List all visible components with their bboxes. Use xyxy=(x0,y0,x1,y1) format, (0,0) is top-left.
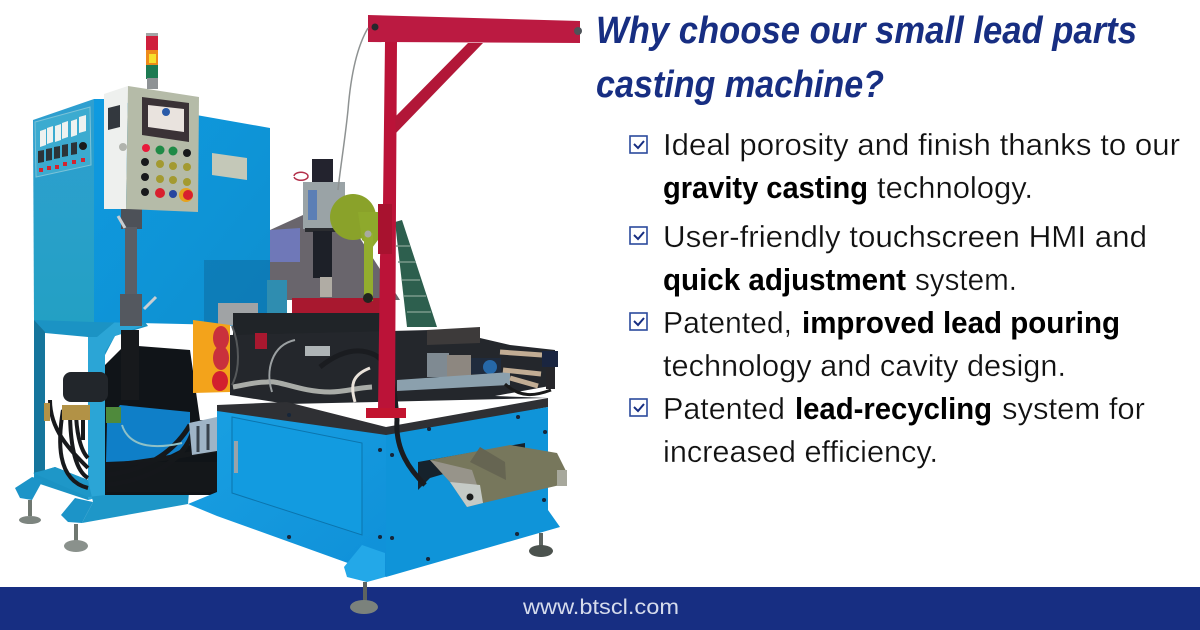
benefit 1: Ideal porosity and finish thanks to our xyxy=(663,127,1180,162)
benefit 4 xyxy=(630,391,1145,469)
base body xyxy=(188,398,560,614)
red crane xyxy=(330,15,582,418)
heading: Why choose our small lead parts xyxy=(596,10,1137,52)
checkbox icon xyxy=(630,227,647,244)
signal light tower xyxy=(146,33,158,89)
benefit 1 xyxy=(630,127,1180,205)
checkbox icon xyxy=(630,399,647,416)
outfeed conveyor xyxy=(418,443,567,507)
benefit 1: gravity casting xyxy=(663,170,868,205)
front foot xyxy=(344,545,385,614)
benefit 4: lead-recycling xyxy=(795,391,992,426)
touchscreen xyxy=(142,97,189,142)
benefit 4: system for xyxy=(1002,391,1145,426)
heading: casting machine? xyxy=(596,64,884,106)
benefit 3: technology and cavity design. xyxy=(663,348,1066,383)
inclined conveyor xyxy=(395,220,437,327)
upper cabinet xyxy=(33,99,270,326)
temperature controller panel xyxy=(35,107,91,177)
benefit 4: Patented xyxy=(663,391,785,426)
benefit 2: User-friendly touchscreen HMI and xyxy=(663,219,1147,254)
benefit 2: system. xyxy=(915,262,1017,297)
electrical socket box xyxy=(193,320,238,393)
benefit 3 xyxy=(630,305,1120,383)
casting head xyxy=(270,159,400,300)
control box xyxy=(104,86,199,212)
door xyxy=(232,417,362,535)
hoist cable xyxy=(338,28,368,190)
benefit 3: improved lead pouring xyxy=(802,305,1120,340)
right leveller xyxy=(529,533,553,557)
left feet and levellers xyxy=(15,477,93,552)
winch xyxy=(330,194,392,303)
middle machinery xyxy=(218,280,558,404)
benefit 1: technology. xyxy=(877,170,1033,205)
website url: www.btscl.com xyxy=(522,596,679,619)
hose xyxy=(320,351,425,485)
benefit 3: Patented, xyxy=(663,305,792,340)
support column xyxy=(118,209,156,326)
casting machine illustration xyxy=(15,15,582,614)
benefit 2 xyxy=(630,219,1147,297)
benefit 2: quick adjustment xyxy=(663,262,906,297)
heading xyxy=(596,10,1137,106)
benefit 4: increased efficiency. xyxy=(663,434,938,469)
checkbox icon xyxy=(630,136,647,153)
buttons xyxy=(141,144,193,202)
checkbox icon xyxy=(630,313,647,330)
footer bar xyxy=(0,587,1200,630)
nameplate xyxy=(212,153,247,180)
left face xyxy=(188,411,386,577)
lower rear frame xyxy=(33,316,190,523)
hydraulic tank and hoses xyxy=(44,330,218,495)
bolts xyxy=(289,415,545,559)
right face xyxy=(386,407,560,577)
